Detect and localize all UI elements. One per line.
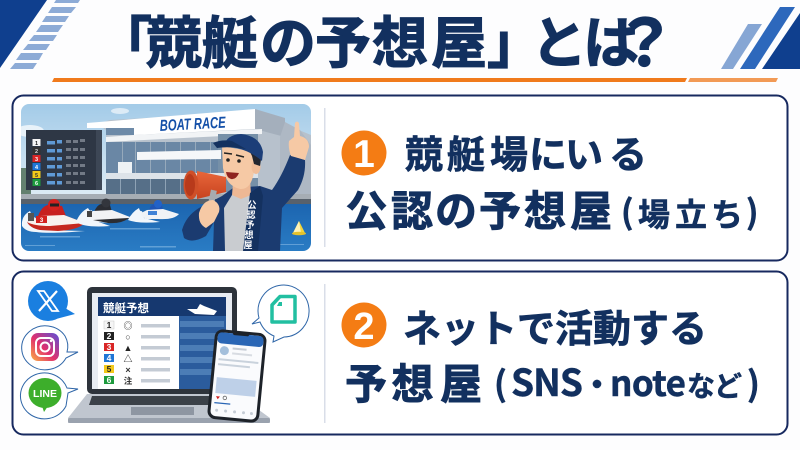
panel: online tipster [12,272,788,434]
divider [324,284,326,423]
divider [324,108,326,247]
boat: blue 4 [128,200,179,223]
scoreboard: 1 [35,141,38,147]
heading line: 公認の予想屋（場立ち）: ) [746,186,758,234]
cap [224,134,263,161]
screen heading: 競艇予想 [103,301,150,315]
odds list: 3 [107,342,112,352]
heading line: 予想屋（SNS・noteなど）: など [687,365,742,405]
odds list: ◎ [123,321,133,331]
icon: X bubble [28,281,75,321]
badge 1 [342,130,386,176]
icon: LINE bubble [20,373,78,419]
heading line: 予想屋（SNS・noteなど）: 予想屋 [345,351,482,412]
scoreboard: 2 [35,149,38,155]
heading line: 予想屋（SNS・noteなど）: ( [494,357,507,406]
heading line: 予想屋（SNS・noteなど）: note [610,356,686,407]
odds list: 1 [107,320,112,330]
scoreboard [26,130,102,190]
odds list: 注 [124,376,133,386]
buoy [292,221,306,235]
odds list: 2 [107,331,112,341]
laptop [68,287,270,423]
panel: on-site tipster [12,96,788,260]
odds list: 6 [107,375,112,385]
heading line: 予想屋（SNS・noteなど） [345,351,760,412]
scoreboard: 4 [35,165,39,171]
scoreboard: 6 [35,181,38,187]
boat: red 3: 3 [40,218,44,224]
megaphone [197,171,226,199]
raised hand [289,122,309,160]
heading line: ネットで活動する: ネットで活動する [403,298,707,353]
odds list: 5 [107,364,112,374]
icon: note bubble [252,285,309,342]
corner decoration: top left [0,0,80,69]
sign: BOAT RACE: BOAT RACE [159,115,227,135]
collar text: 公認予想屋: 屋 [243,240,253,250]
gripping hand [199,200,219,228]
heading line: 公認の予想屋（場立ち） [346,178,758,239]
icon: Instagram bubble [22,326,78,370]
badge 1: 1 [353,133,375,176]
tipster figure [182,122,309,251]
heading line: 予想屋（SNS・noteなど）: ) [747,357,760,406]
jacket [182,155,305,251]
badge 2: 2 [353,306,375,348]
scoreboard: 3 [35,157,38,163]
building [87,109,311,196]
heading line: 予想屋（SNS・noteなど）: ・ [581,360,613,406]
corner decoration: top right [721,7,800,69]
odds list: × [125,365,131,375]
badge 2 [342,302,386,348]
orange underline [52,78,778,82]
collar text: 公認予想屋: 予 [245,219,255,230]
heading line: 予想屋（SNS・noteなど）: SNS [511,353,583,407]
neck [232,183,251,199]
title: 「競艇の予想屋」とは [96,0,639,80]
odds list: 4 [107,353,112,363]
icon: LINE bubble: LINE [33,388,57,400]
collar text: 公認予想屋 [243,200,257,250]
heading line: 競艇場にいる: 競艇場にいる [405,124,647,179]
collar text: 公認予想屋: 想 [244,229,254,240]
illustration: boat race venue and tipster [16,104,311,251]
odds list: ○ [125,332,131,342]
heading line: 公認の予想屋（場立ち）: 公認の予想屋 [346,178,612,239]
collar panel with characters [243,186,263,251]
water [21,204,311,251]
odds list: △ [123,354,133,364]
boat: red 3 [22,199,85,233]
scoreboard: 5 [35,173,38,179]
smartphone [207,329,267,423]
collar text: 公認予想屋: 認 [246,210,256,220]
odds list [104,320,133,386]
heading line: 公認の予想屋（場立ち）: 場立ち [638,190,743,236]
boat: black 2 [76,198,130,226]
heading line: 公認の予想屋（場立ち）: ( [621,186,633,234]
face [222,146,255,189]
collar text: 公認予想屋: 公 [247,200,257,210]
shirt [224,193,250,251]
odds list: ▲ [124,343,132,353]
